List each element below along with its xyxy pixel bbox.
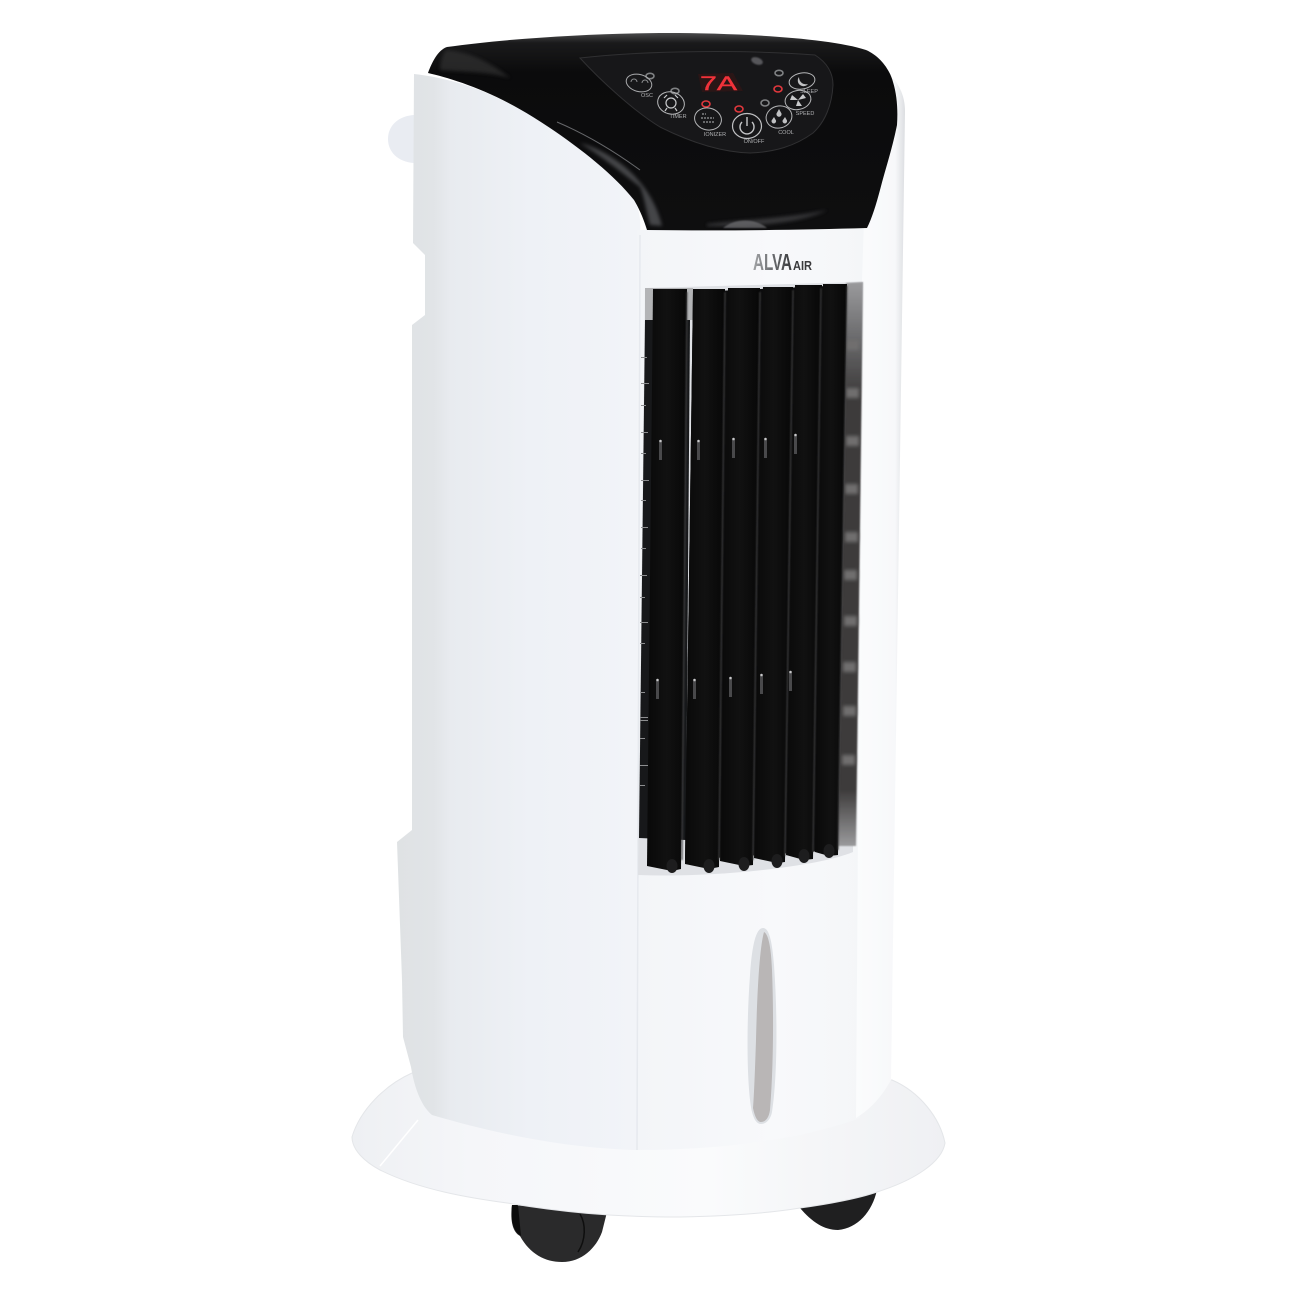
- inner top grey: [645, 288, 693, 320]
- inner left dark vent: [639, 320, 690, 840]
- body: panel seam: [637, 235, 640, 1150]
- water level window: [748, 928, 776, 1124]
- button: SPEED: [783, 88, 814, 117]
- wheel: right caster: [800, 1188, 878, 1230]
- sensor: [750, 56, 764, 66]
- rear handle knob: [388, 115, 414, 163]
- button: ON/OFF: [732, 114, 765, 145]
- brand logo: AIR: [793, 258, 813, 273]
- inner centre dark: [685, 285, 850, 860]
- cap highlight line: [557, 122, 640, 170]
- base seam: [380, 1120, 418, 1166]
- clip dots: [656, 434, 797, 681]
- button: SPEED: SPEED: [796, 111, 814, 117]
- button: TIMER: TIMER: [669, 114, 687, 120]
- button: SLEEP: [788, 71, 818, 95]
- window: air outlet recess: [638, 282, 863, 875]
- button: OSC: [624, 71, 654, 99]
- display: 7A: [700, 74, 738, 95]
- vane edge highlights: [682, 286, 847, 860]
- vanes: six black louvres: [647, 284, 847, 873]
- wheel: left caster: [511, 1205, 607, 1262]
- button: OSC: OSC: [641, 93, 653, 99]
- cap reflection top left: [440, 50, 510, 78]
- control head: glossy black cap: [428, 33, 897, 230]
- right louvre bars: [842, 340, 859, 765]
- body: side panel: [397, 74, 640, 1150]
- body: right strip: [856, 78, 905, 1118]
- control panel surface: [580, 52, 833, 153]
- button: COOL: [764, 103, 794, 136]
- inner right grey: [837, 282, 863, 846]
- left vent light marks: [640, 357, 649, 786]
- button: TIMER: [655, 89, 687, 120]
- base: round wheeled foot: [352, 1073, 945, 1217]
- cap reflection bottom centre: [723, 220, 767, 228]
- brand logo: ALVA: [753, 249, 792, 275]
- button: SLEEP: SLEEP: [800, 89, 818, 95]
- vane tips: [666, 844, 834, 873]
- button: COOL: COOL: [778, 130, 794, 136]
- display: [698, 73, 743, 95]
- button: IONIZER: [693, 105, 726, 138]
- cap reflection lower: [580, 143, 662, 226]
- body: front panel: [637, 226, 870, 1150]
- button: ON/OFF: ON/OFF: [744, 139, 765, 145]
- cap reflection bottom: [707, 210, 827, 226]
- vane clips: [656, 436, 797, 699]
- button: IONIZER: IONIZER: [704, 132, 726, 138]
- status LEDs: [646, 70, 783, 112]
